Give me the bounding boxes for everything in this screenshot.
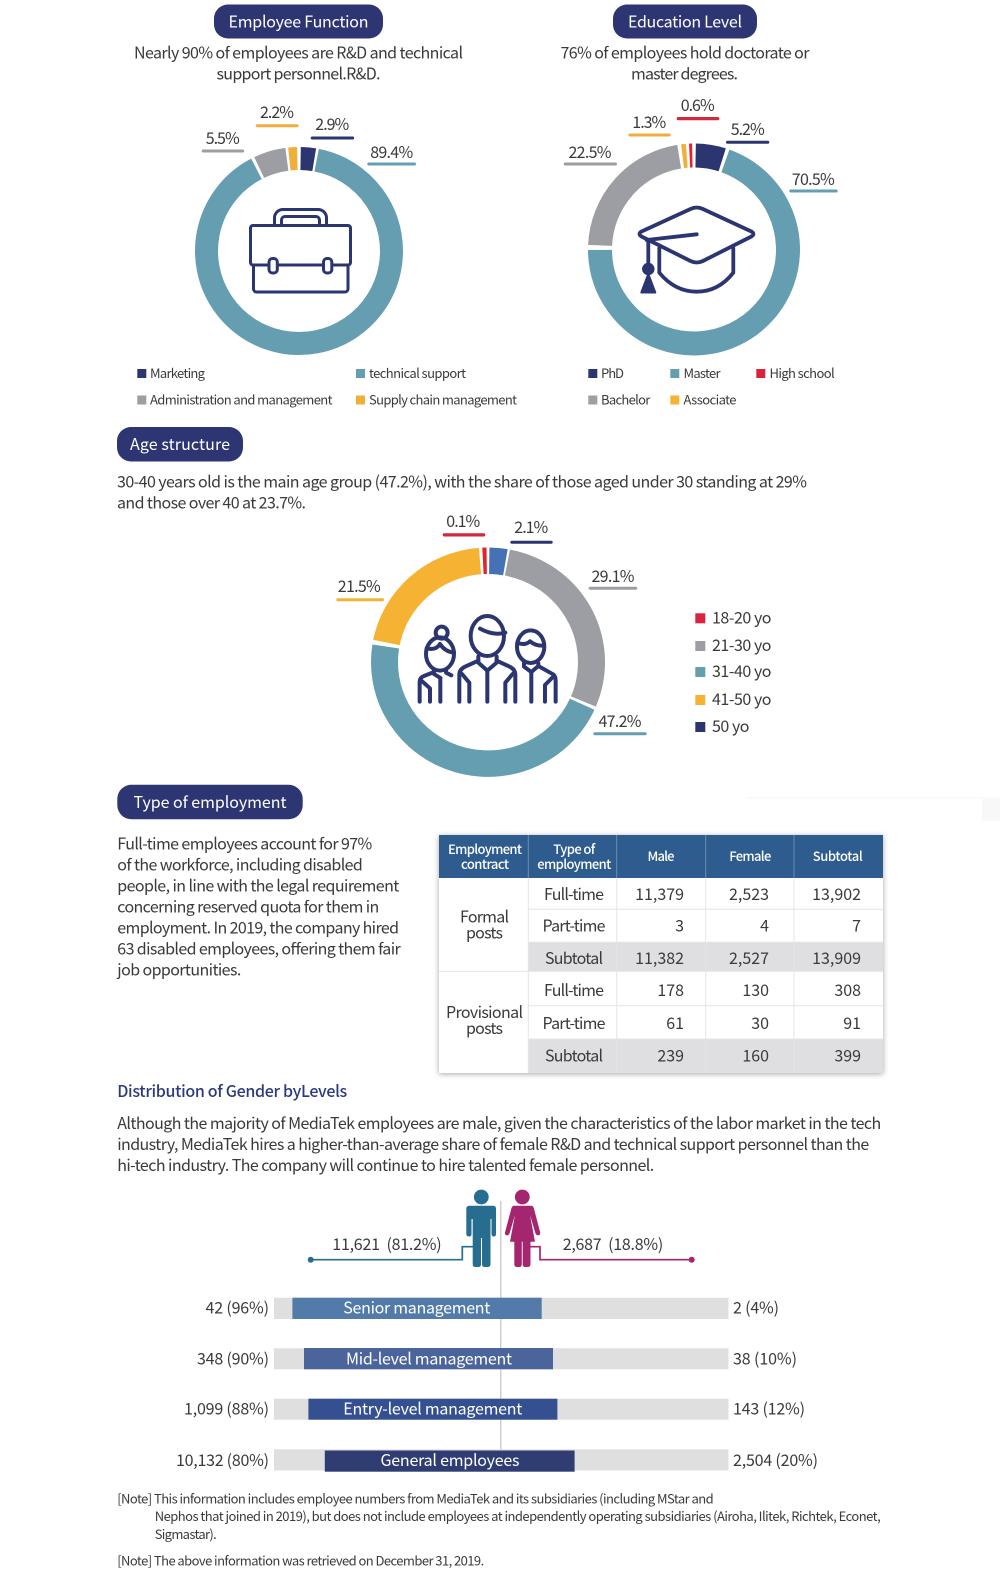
text: gender distribution description: hi-tech industry. The company will continue to hire talented female personnel.	[117, 1152, 654, 1176]
bar: entry-level management: 143 (12%)	[733, 1396, 805, 1420]
icon part: right person	[517, 630, 556, 702]
text: type of employment description: employment. In 2019, the company hired	[117, 914, 399, 938]
labels: age structure values: 21.5%	[338, 573, 381, 597]
labels: education level values: 1.3%	[632, 109, 667, 133]
text: type of employment description: 63 disabled employees, offering them fair	[117, 936, 401, 960]
table: employment by contract and gender: 178	[657, 977, 684, 1001]
icon: male figure	[466, 1190, 496, 1267]
panel: employee function	[134, 4, 517, 408]
table: employment by contract and gender: Part-time	[542, 912, 606, 936]
labels: education level values: 0.6%	[681, 92, 715, 116]
table: employment by contract and gender: Formal	[460, 904, 509, 928]
table: employment by contract and gender: 308	[834, 977, 861, 1001]
table: employment by contract and gender: 13,909	[812, 945, 861, 969]
text: gender distribution description: Although the majority of MediaTek employees are male, given the characteristics of the labor market in the tech	[117, 1110, 881, 1134]
panel: type of employment	[116, 785, 883, 1073]
bar: entry-level management	[184, 1396, 805, 1420]
labels: education level values: 5.2%	[731, 116, 765, 140]
labels: age structure values	[336, 508, 647, 735]
icon part: centre person	[459, 616, 515, 702]
panel: distribution of gender by levels	[117, 1078, 881, 1570]
table: employment by contract and gender: 2,523	[729, 881, 769, 905]
legend: employee function: Marketing	[150, 363, 206, 382]
donut chart: age structure	[351, 528, 625, 797]
text: type of employment description: Full-time employees account for 97%	[117, 830, 373, 854]
table: employment by contract and gender: 399	[834, 1042, 861, 1066]
notes: Nephos that joined in 2019), but does not include employees at independently operating subsidiaries (Airoha, Ilitek, Richtek, Econet,	[155, 1506, 881, 1525]
table: employment by contract and gender: Male	[648, 846, 674, 865]
text: employee function summary: support personnel.R&D.	[216, 60, 380, 84]
bar: entry-level management: 1,099 (88%)	[184, 1396, 269, 1420]
table: employment by contract and gender: 130	[742, 977, 769, 1001]
table: employment by contract and gender: 3	[675, 912, 684, 936]
heading: employee function: Employee Function	[228, 8, 368, 32]
legend: education level: PhD	[601, 363, 624, 382]
heading: age structure	[117, 427, 243, 462]
table: employment by contract and gender: 160	[742, 1042, 769, 1066]
legend: age structure: 31-40 yo	[712, 658, 772, 682]
table: employment by contract and gender	[439, 835, 883, 1073]
heading: type of employment	[117, 785, 303, 819]
table: employment by contract and gender: employment	[537, 854, 611, 873]
heading: age structure: Age structure	[130, 431, 230, 455]
text: gender distribution description	[117, 1110, 881, 1176]
heading: distribution of gender: Distribution of Gender byLevels	[117, 1078, 348, 1102]
heading: employee function	[214, 4, 383, 38]
bar: entry-level management: Entry-level management	[343, 1396, 522, 1420]
donut chart: employee function	[176, 128, 422, 374]
labels: employee function values: 89.4%	[370, 139, 413, 163]
table: employment by contract and gender: 30	[751, 1010, 769, 1034]
text: type of employment description: job opportunities.	[116, 956, 241, 980]
icon part: left person	[420, 627, 454, 702]
text: employee function summary: Nearly 90% of employees are R&D and technical	[134, 40, 463, 64]
table: employment by contract and gender: 2,527	[729, 945, 769, 969]
labels: age structure values: 47.2%	[598, 708, 642, 732]
bar: general employees: 2,504 (20%)	[733, 1447, 818, 1471]
bar: senior management: Senior management	[343, 1294, 490, 1318]
table: employment by contract and gender: posts	[466, 1015, 503, 1039]
legend: employee function	[137, 363, 517, 408]
labels: age structure values: 0.1%	[446, 508, 481, 532]
table: employment by contract and gender: contract	[461, 854, 509, 873]
legend: employee function: Administration and management	[150, 390, 333, 408]
labels: employee function values	[202, 99, 416, 166]
table: employment by contract and gender: Subtotal	[545, 945, 603, 969]
legend: age structure: 21-30 yo	[712, 632, 772, 656]
table: employment by contract and gender: 11,379	[635, 881, 684, 905]
legend: education level	[588, 363, 835, 408]
text: age structure summary: 30-40 years old is the main age group (47.2%), with the share of those aged under 30 standing at 29%	[117, 468, 807, 492]
labels: age structure values: 2.1%	[514, 514, 549, 538]
bar: general employees: 10,132 (80%)	[176, 1447, 269, 1471]
heading: education level: Education Level	[628, 8, 742, 32]
legend: age structure: 18-20 yo	[712, 604, 772, 628]
table: employment by contract and gender: 13,902	[812, 881, 861, 905]
table: employment by contract and gender: 7	[852, 912, 861, 936]
panel: age structure	[117, 427, 807, 797]
table: employment by contract and gender: Subtotal	[813, 846, 863, 865]
icon: three people	[420, 616, 556, 702]
heading: education level	[613, 4, 757, 38]
table: employment by contract and gender: Full-time	[544, 977, 604, 1001]
legend: education level: Master	[684, 363, 721, 382]
notes	[117, 1488, 881, 1570]
table: employment by contract and gender: Employment	[448, 839, 522, 858]
text: type of employment description	[116, 830, 401, 980]
table: employment by contract and gender: 91	[843, 1010, 861, 1034]
bar: general employees	[176, 1447, 818, 1472]
text: employee function summary	[134, 40, 463, 84]
text: education level summary	[560, 40, 810, 84]
bar: mid-level management: Mid-level management	[346, 1346, 512, 1370]
gender totals: female	[505, 1190, 695, 1267]
legend: employee function: Supply chain management	[369, 390, 517, 408]
text: education level summary: master degrees.	[631, 60, 738, 84]
labels: age structure values: 29.1%	[592, 563, 635, 587]
bar: mid-level management: 38 (10%)	[733, 1346, 797, 1370]
bar: general employees: General employees	[380, 1447, 520, 1471]
table: employment by contract and gender: Full-time	[544, 881, 604, 905]
table: employment by contract and gender: Provisional	[446, 999, 523, 1023]
bar: mid-level management: 348 (90%)	[197, 1346, 269, 1370]
labels: employee function values: 5.5%	[206, 125, 240, 149]
table: employment by contract and gender: 239	[657, 1042, 684, 1066]
legend: education level: High school	[770, 363, 835, 382]
icon: briefcase	[250, 210, 350, 292]
bar: senior management	[206, 1294, 779, 1319]
donut chart: education level	[574, 130, 814, 369]
gender totals: male	[308, 1190, 496, 1267]
text: gender distribution description: industry, MediaTek hires a higher-than-average share of female R&D and technical support personnel than the	[117, 1131, 869, 1155]
table: employment by contract and gender: Subtotal	[545, 1042, 603, 1066]
legend: education level: Associate	[684, 390, 736, 408]
labels: employee function values: 2.2%	[260, 99, 294, 123]
gender totals: male: 11,621 (81.2%)	[332, 1231, 442, 1255]
gender totals: female: 2,687 (18.8%)	[563, 1231, 663, 1255]
labels: education level values: 70.5%	[792, 166, 835, 190]
labels: employee function values: 2.9%	[315, 111, 350, 135]
bar: senior management: 2 (4%)	[733, 1294, 779, 1318]
legend: age structure	[695, 604, 772, 737]
legend: employee function: technical support	[369, 363, 466, 382]
legend: age structure: 50 yo	[712, 713, 750, 737]
table: employment by contract and gender: 61	[666, 1010, 684, 1034]
text: age structure summary	[117, 468, 807, 514]
icon: graduation cap	[640, 208, 753, 292]
table: employment by contract and gender: Female	[729, 846, 771, 865]
table: employment by contract and gender: posts	[466, 920, 503, 944]
panel: education level	[560, 4, 838, 408]
labels: education level values: 22.5%	[568, 139, 612, 163]
text: type of employment description: concerning reserved quota for them in	[117, 894, 379, 918]
text: age structure summary: and those over 40 at 23.7%.	[117, 490, 306, 514]
bar: mid-level management	[197, 1346, 797, 1370]
legend: age structure: 41-50 yo	[712, 686, 772, 710]
heading: type of employment: Type of employment	[134, 789, 286, 813]
notes: [Note] This information includes employee numbers from MediaTek and its subsidiaries (including MStar and	[117, 1488, 714, 1508]
notes: [Note] The above information was retrieved on December 31, 2019.	[117, 1550, 484, 1570]
text: education level summary: 76% of employees hold doctorate or	[560, 40, 810, 64]
icon: female figure	[505, 1190, 540, 1267]
text: type of employment description: of the workforce, including disabled	[117, 852, 363, 876]
text: type of employment description: people, in line with the legal requirement	[117, 872, 399, 896]
notes: Sigmastar).	[155, 1524, 217, 1543]
legend: education level: Bachelor	[601, 390, 651, 408]
table: employment by contract and gender: 4	[760, 912, 769, 936]
table: employment by contract and gender: 11,382	[635, 945, 684, 969]
labels: education level values	[564, 92, 838, 192]
bar: senior management: 42 (96%)	[206, 1294, 269, 1318]
table: employment by contract and gender: Type of	[553, 839, 596, 858]
table: employment by contract and gender: Part-time	[542, 1010, 606, 1034]
